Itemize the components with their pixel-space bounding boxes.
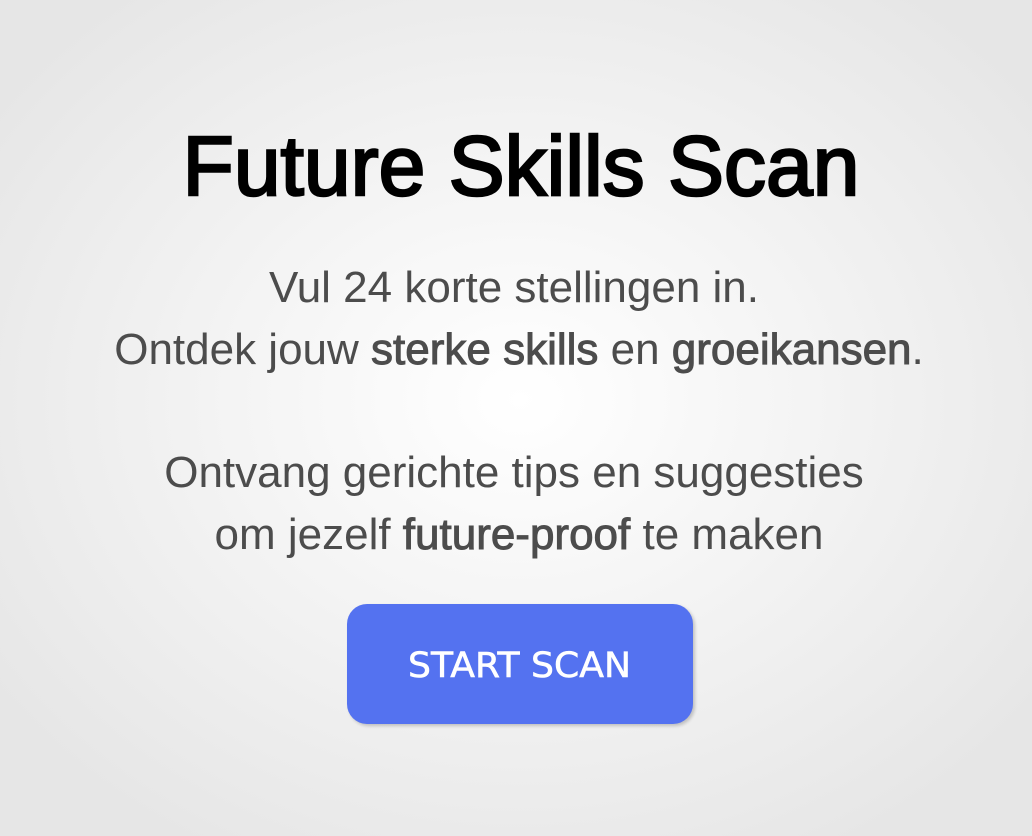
text block: intro: Vul 24 korte stellingen in. bbox=[269, 263, 759, 312]
title: Future Skills Scan bbox=[183, 119, 859, 213]
text block: tips bbox=[164, 448, 864, 559]
text block: tips: om jezelf future-proof te maken bbox=[214, 510, 823, 559]
button: start scan: START SCAN bbox=[408, 646, 631, 686]
text block: tips: Ontvang gerichte tips en suggesties bbox=[164, 448, 864, 497]
button: start scan bbox=[347, 604, 693, 724]
text block: intro bbox=[114, 263, 924, 374]
text block: intro: Ontdek jouw sterke skills en groeikansen. bbox=[114, 325, 924, 374]
